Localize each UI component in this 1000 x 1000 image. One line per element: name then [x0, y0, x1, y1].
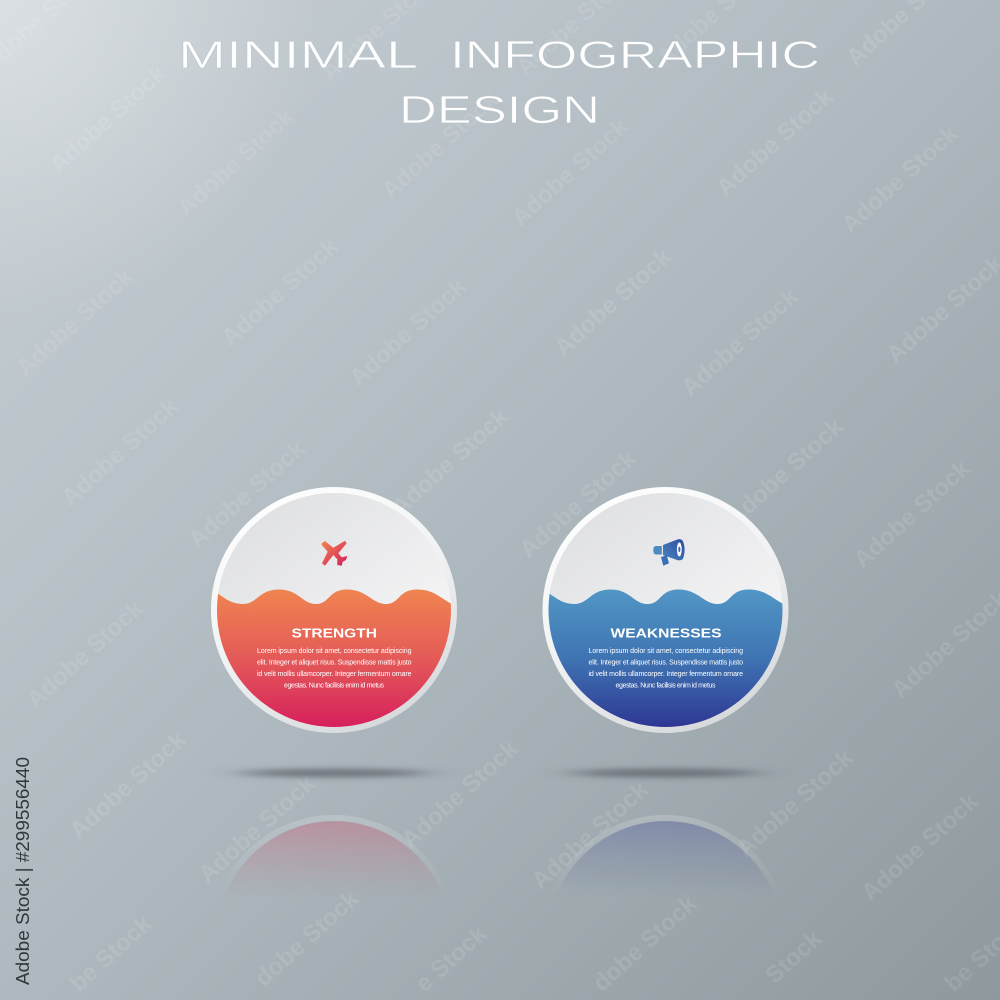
wave fill — [548, 590, 782, 727]
watermark pattern: Adobe Stock — [11, 263, 139, 382]
circle ring — [211, 487, 457, 733]
watermark pattern: Adobe Stock — [376, 86, 504, 205]
watermark pattern: Adobe Stock — [549, 243, 677, 362]
icon: megaphone — [653, 539, 685, 566]
title: MINIMAL — [178, 34, 418, 77]
wave fill — [217, 590, 451, 727]
watermark pattern: Adobe Stock — [396, 735, 524, 854]
panel: weaknesses — [536, 487, 792, 740]
watermark pattern: Adobe Stock — [731, 744, 859, 863]
title: INFOGRAPHIC — [450, 34, 820, 77]
watermark pattern: Adobe Stock — [44, 60, 172, 179]
watermark pattern: Adobe Stock — [386, 403, 514, 522]
reflection: strength — [235, 815, 433, 877]
watermark pattern: Stock — [760, 925, 827, 989]
watermark pattern: Adobe Stock — [216, 233, 344, 352]
watermark pattern: Adobe Stock — [526, 776, 654, 895]
shadow: strength — [239, 768, 429, 778]
text block: weaknesses: Lorem ipsum dolor sit amet, consectetur adipiscing — [588, 648, 743, 655]
circle inner — [548, 493, 782, 727]
text block: strength: egestas. Nunc facilisis enim id metus — [284, 682, 384, 690]
text block: strength — [257, 648, 412, 690]
text block: weaknesses: egestas. Nunc facilisis enim id metus — [616, 682, 716, 690]
watermark pattern: Adobe Stock — [836, 120, 964, 239]
heading: strength: STRENGTH — [292, 626, 377, 640]
watermark pattern: Adobe Stock — [21, 595, 149, 714]
text block: weaknesses — [588, 648, 743, 690]
watermark pattern: Adobe Stock — [721, 413, 849, 532]
watermark pattern: Adobe Stock — [56, 393, 184, 512]
circle ring — [542, 487, 788, 733]
text block: strength: id velit mollis ullamcorper. Integer fermentum ornare — [257, 671, 412, 678]
shadow: weaknesses — [570, 768, 760, 778]
text block: weaknesses: elit. Integer et aliquet risus. Suspendisse mattis justo — [588, 660, 743, 666]
text block: strength: Lorem ipsum dolor sit amet, consectetur adipiscing — [257, 648, 412, 655]
watermark pattern: Adobe Stock — [172, 103, 300, 222]
watermark pattern: dobe Stock — [250, 885, 364, 992]
title: DESIGN — [399, 89, 600, 132]
watermark pattern: Adobe Stock — [64, 726, 192, 845]
watermark pattern: Adobe Stock — [506, 113, 634, 232]
watermark pattern: Adobe Stock — [676, 283, 804, 402]
watermark pattern: Adobe Stock — [514, 445, 642, 564]
watermark pattern: Adobe Stock — [344, 273, 472, 392]
reflection: weaknesses — [567, 815, 762, 877]
icon: airplane — [322, 541, 347, 566]
watermark pattern: Adobe Stock — [183, 435, 311, 554]
text block: weaknesses: id velit mollis ullamcorper. Integer fermentum ornare — [588, 671, 743, 678]
watermark pattern: Adobe Stock — [856, 788, 984, 907]
circle inner — [217, 493, 451, 727]
watermark pattern: be Stock — [65, 910, 157, 997]
watermark pattern: e Stock — [411, 920, 492, 998]
watermark pattern: Adobe Stock — [193, 770, 321, 889]
watermark pattern: dobe Stock — [588, 890, 702, 997]
title — [178, 34, 820, 132]
panel: strength — [205, 487, 460, 740]
text block: strength: elit. Integer et aliquet risus. Suspendisse mattis justo — [257, 660, 412, 666]
heading: weaknesses: WEAKNESSES — [610, 626, 722, 640]
watermark pattern: Adobe Stock — [848, 455, 976, 574]
stock id label: Adobe Stock | #299556440 — [12, 757, 33, 985]
watermark pattern: Adobe Stock — [711, 83, 839, 202]
